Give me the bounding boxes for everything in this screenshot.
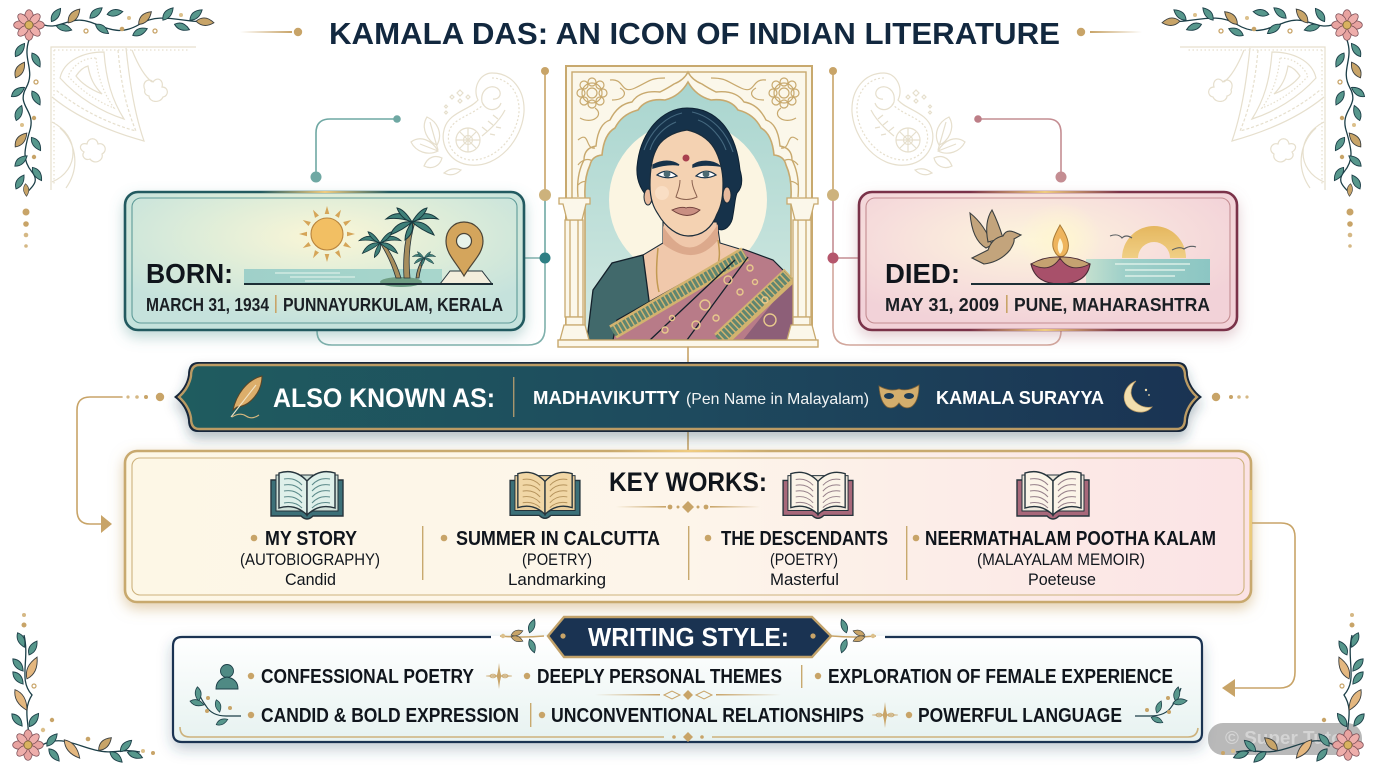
style: row 2: UNCONVENTIONAL RELATIONSHIPS: [551, 705, 864, 727]
blouse: [587, 255, 650, 340]
ornament: left inner sprig: [189, 687, 241, 727]
icon: sun: [299, 206, 355, 262]
panel: also known as banner: [174, 362, 1202, 432]
ornament: heading left sprig: [500, 618, 544, 654]
neck and chest: [643, 222, 743, 306]
icon: feather quill: [231, 376, 262, 418]
ornament: heading right sprig: [832, 618, 876, 654]
saree: [613, 249, 793, 340]
hair and bun: [637, 108, 742, 230]
arch opening: [585, 82, 791, 340]
style: row 2: [248, 702, 1122, 728]
work: neermathalam pootha kalam: [913, 528, 1216, 589]
ornament: right inner sprig: [1135, 686, 1188, 725]
title: KAMALA DAS: AN ICON OF INDIAN LITERATURE: [329, 16, 1060, 51]
right column: [787, 198, 818, 340]
ornament: top-right floral vine: [1162, 5, 1367, 248]
style: row 1: DEEPLY PERSONAL THEMES: [537, 666, 782, 688]
work: the descendants: (POETRY): [770, 550, 838, 569]
born details: PUNNAYURKULAM, KERALA: [283, 294, 503, 315]
icon: setting sun: [1122, 226, 1186, 258]
panel: writing style: [172, 617, 1203, 743]
work: my story: MY STORY: [265, 528, 358, 550]
heading: key works: KEY WORKS:: [609, 467, 767, 497]
died details: MAY 31, 2009: [885, 294, 999, 315]
connector: banner left to key works: [77, 393, 164, 533]
style: row 1: [248, 663, 1173, 689]
style: row 2: POWERFUL LANGUAGE: [918, 705, 1122, 727]
connector: left timeline rail: [317, 67, 551, 345]
work: the descendants: THE DESCENDANTS: [721, 528, 888, 550]
watermark: © Super Tutor: [1225, 728, 1350, 748]
figure: [637, 108, 743, 306]
icon: person: [216, 664, 238, 689]
style: row 1: EXPLORATION OF FEMALE EXPERIENCE: [828, 666, 1173, 688]
middle ornament: [595, 690, 781, 700]
born details: MARCH 31, 1934: [146, 294, 270, 315]
icon: location pin: [440, 222, 492, 284]
ears: [644, 189, 652, 205]
connector: banner right dots: [1212, 393, 1249, 401]
icon: book gold: [510, 472, 580, 518]
work: summer in calcutta: Landmarking: [508, 570, 606, 589]
ornament: left paisley: [411, 73, 524, 175]
heading: died: DIED:: [885, 258, 960, 289]
ornament: top-left mandala: [51, 47, 196, 190]
work: neermathalam pootha kalam: Poeteuse: [1028, 570, 1096, 589]
left column: [559, 198, 590, 340]
arch outer gold outline: [578, 72, 798, 197]
pen name: (Pen Name in Malayalam): [686, 391, 869, 408]
icon: crescent moon: [1124, 381, 1152, 412]
work: my story: Candid: [285, 570, 336, 589]
frame base: [558, 340, 818, 347]
frame outer panel: [566, 66, 812, 342]
ornament: bottom-right floral vine: [1221, 613, 1366, 764]
icon: dove: [970, 210, 1021, 264]
ornament: top-right mandala: [1180, 47, 1325, 190]
icon: mask: [879, 385, 919, 408]
banner heading: ALSO KNOWN AS:: [273, 383, 495, 413]
work: neermathalam pootha kalam: NEERMATHALAM POOTHA KALAM: [925, 528, 1216, 550]
face: [650, 130, 723, 236]
pen name: MADHAVIKUTTY: [533, 387, 681, 408]
connector: key works right to writing style: [1222, 523, 1295, 697]
connector: right timeline rail: [827, 67, 1061, 345]
connector: died top: [974, 115, 1066, 182]
work: summer in calcutta: SUMMER IN CALCUTTA: [456, 528, 660, 550]
icon: sea band: [1086, 259, 1210, 284]
work: the descendants: [705, 528, 888, 589]
ornament: right paisley: [852, 73, 965, 175]
died details: [885, 294, 1210, 315]
work: neermathalam pootha kalam: (MALAYALAM MEMOIR): [977, 550, 1145, 569]
icon: palm trees: [359, 208, 438, 287]
panel: key works: [125, 450, 1252, 602]
work: my story: [240, 528, 380, 589]
work: the descendants: Masterful: [770, 570, 839, 589]
bottom gold rule: [180, 727, 1198, 742]
born details: [146, 294, 503, 315]
alternate name: KAMALA SURAYYA: [936, 387, 1104, 408]
work: summer in calcutta: (POETRY): [522, 550, 592, 569]
work: summer in calcutta: [441, 528, 660, 589]
ornament: bottom-left floral vine: [10, 613, 155, 764]
panel: died: [859, 191, 1237, 331]
icon: book rose: [783, 472, 853, 518]
arch spandrel ornaments: [577, 78, 799, 192]
heading plate: WRITING STYLE:: [588, 622, 789, 652]
ornament: top-left floral vine: [9, 5, 214, 248]
connector: born top: [310, 115, 401, 182]
icon: book plum: [1017, 472, 1089, 519]
heading ornament: [616, 501, 760, 513]
portrait frame: [558, 66, 818, 347]
saree borders: [613, 254, 745, 332]
icon: birds: [1110, 235, 1196, 250]
work: my story: (AUTOBIOGRAPHY): [240, 550, 380, 569]
icon: lamp glow: [1018, 202, 1102, 278]
style: row 1: CONFESSIONAL POETRY: [261, 666, 475, 688]
icon: oil lamp: [1031, 225, 1090, 284]
watermark: [1208, 723, 1362, 755]
icon: book teal: [271, 472, 343, 519]
connector: portrait to banner: [687, 347, 689, 452]
halo: [609, 121, 767, 279]
heading plate: [548, 617, 831, 657]
died details: PUNE, MAHARASHTRA: [1014, 294, 1210, 315]
icon: sea band: [244, 269, 442, 284]
style: row 2: CANDID & BOLD EXPRESSION: [261, 705, 519, 727]
pen name: [533, 387, 869, 408]
key works right glow: [1249, 490, 1252, 560]
panel: born: [125, 191, 524, 330]
heading: born: BORN:: [146, 258, 233, 289]
